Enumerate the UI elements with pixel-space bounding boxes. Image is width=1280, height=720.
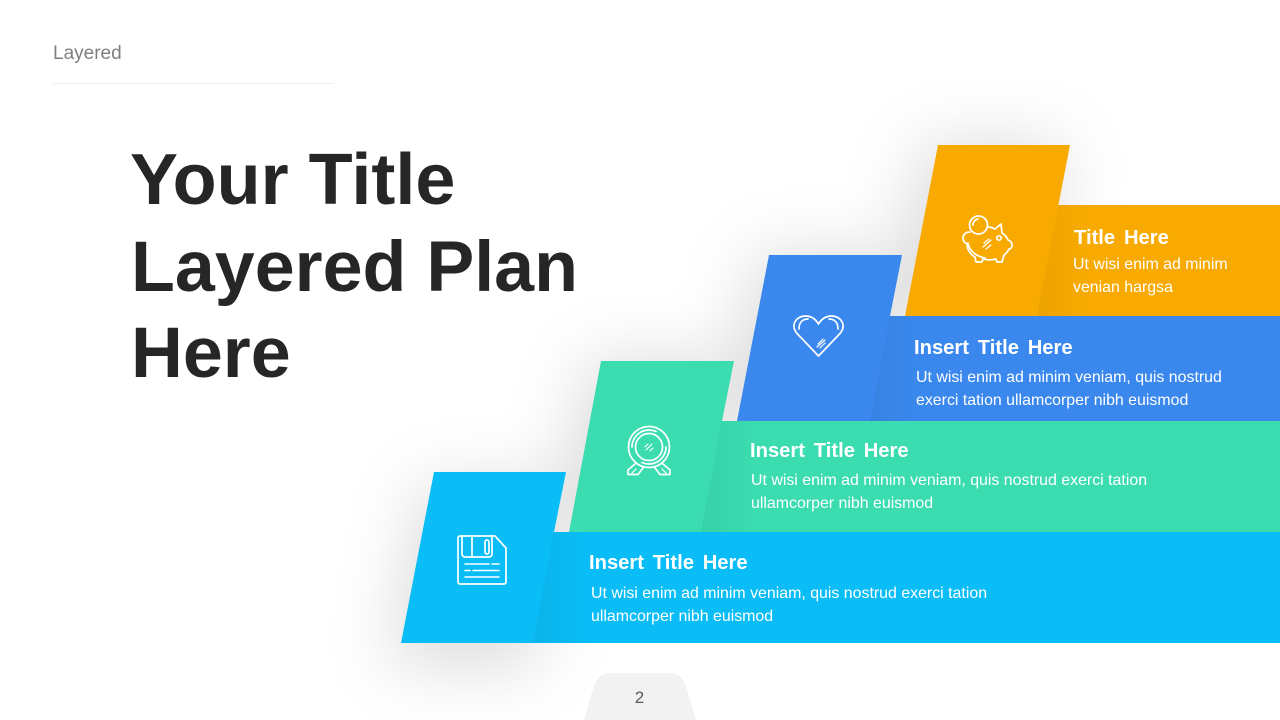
text: layer 3: Ut wisi enim ad minim veniam, quis nostrud (916, 369, 1222, 386)
text: layer 3 (914, 337, 1222, 409)
text: layer 2 (750, 440, 1147, 512)
soft shadows behind layers (390, 145, 1065, 665)
text: layer 4: Title Here (1074, 227, 1169, 249)
text: layer 4: venian hargsa (1073, 279, 1173, 296)
text: layer 3: exerci tation ullamcorper nibh euismod (916, 392, 1188, 409)
text: layer 4 (1073, 227, 1228, 296)
page number tab: 2 (635, 688, 644, 707)
icon: medal (628, 426, 670, 474)
title: Your Title (130, 140, 455, 220)
text: layer 2: Ut wisi enim ad minim veniam, quis nostrud exerci tation (751, 472, 1147, 489)
layer 2: green (569, 361, 1280, 532)
layer 1: cyan (401, 472, 1280, 643)
text: layer 3: Insert Title Here (914, 337, 1073, 359)
text: layer 2: ullamcorper nibh euismod (751, 495, 933, 512)
text: layer 1: Insert Title Here (589, 552, 748, 574)
layer 4: orange (905, 145, 1280, 316)
text: layer 2: Insert Title Here (750, 440, 909, 462)
title: Here (131, 313, 291, 393)
icon: floppy disk (458, 536, 506, 584)
text: layer 4: Ut wisi enim ad minim (1073, 256, 1228, 273)
title (130, 140, 578, 393)
text: layer 1 (589, 552, 987, 625)
text: layer 1: ullamcorper nibh euismod (591, 608, 773, 625)
title: Layered Plan (131, 227, 578, 307)
text: layer 1: Ut wisi enim ad minim veniam, quis nostrud exerci tation (591, 585, 987, 602)
page number tab (584, 673, 696, 720)
header label: Layered (53, 43, 122, 64)
icon: piggy bank (963, 216, 1012, 262)
layer 3: blue (737, 255, 1280, 421)
icon: heart (794, 316, 843, 356)
